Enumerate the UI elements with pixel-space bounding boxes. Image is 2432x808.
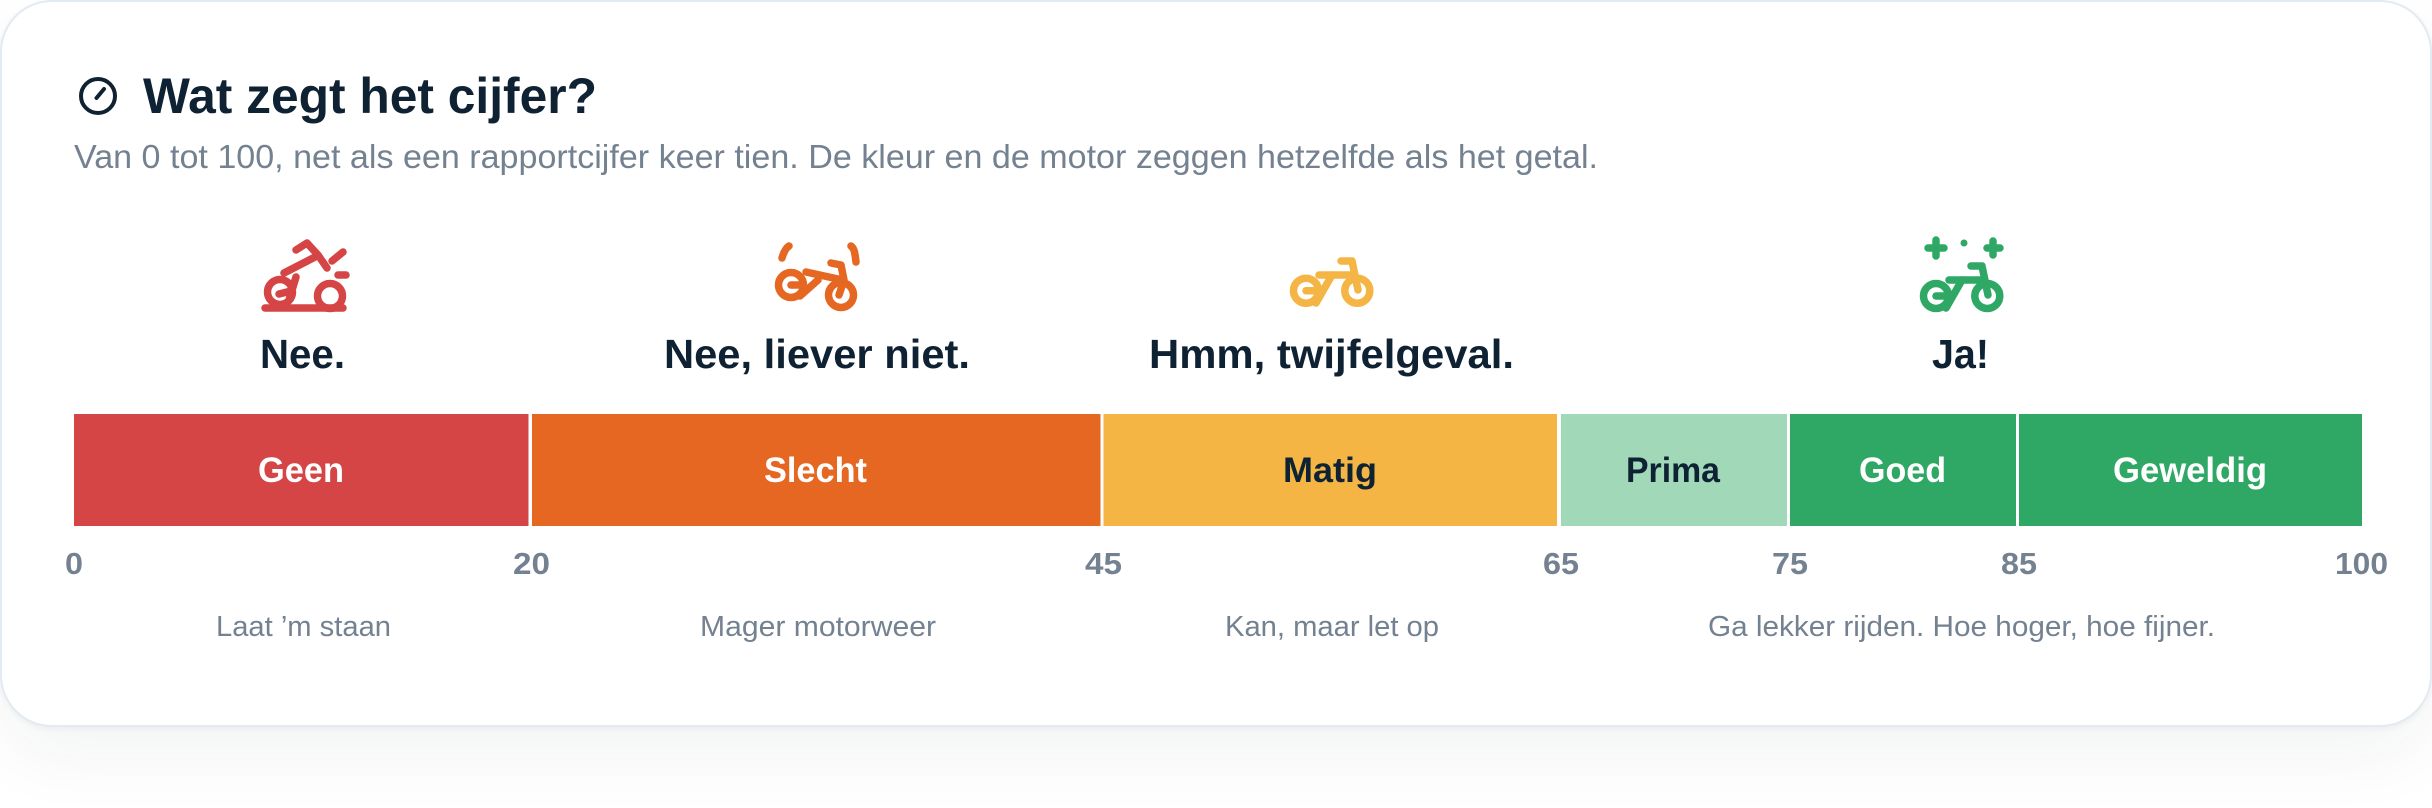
segment: Matig	[1104, 414, 1557, 526]
scale numbers: 75	[1772, 546, 1808, 581]
segment: Slecht: Slecht	[764, 451, 867, 490]
segment: Matig: Matig	[1283, 451, 1377, 490]
caption: Kan, maar let op: Kan, maar let op	[1225, 611, 1439, 643]
verdict: Ja!: Ja!	[1932, 331, 1989, 377]
scale numbers: 100	[2335, 546, 2388, 581]
score bar	[74, 414, 2362, 526]
icon: gauge	[81, 79, 115, 113]
title: Wat zegt het cijfer?	[143, 68, 597, 124]
scale numbers: 45	[1085, 546, 1122, 581]
segment: Goed	[1790, 414, 2016, 526]
segment: Prima: Prima	[1626, 451, 1721, 490]
segment: Goed: Goed	[1859, 451, 1946, 490]
caption: Mager motorweer: Mager motorweer	[700, 611, 936, 643]
scale numbers: 65	[1543, 546, 1579, 581]
icon: shaky motorcycle	[778, 246, 856, 308]
segment: Geweldig	[2019, 414, 2362, 526]
scale numbers: 0	[65, 546, 83, 581]
scale numbers: 85	[2001, 546, 2037, 581]
verdict: Nee, liever niet.: Nee, liever niet.	[664, 331, 970, 377]
segment: Prima	[1561, 414, 1787, 526]
icon: crashed motorcycle	[265, 243, 346, 308]
verdict: Hmm, twijfelgeval.: Hmm, twijfelgeval.	[1149, 331, 1514, 377]
icon: happy motorcycle with sparkles	[1924, 240, 2000, 308]
verdict: Nee.: Nee.	[260, 331, 345, 377]
caption: Laat 'm staan: Laat ’m staan	[216, 611, 391, 643]
scale numbers: 20	[513, 546, 550, 581]
scale numbers	[65, 546, 2388, 581]
segment: Geweldig: Geweldig	[2113, 451, 2267, 490]
segment: Geen	[74, 414, 528, 526]
caption: Ga lekker rijden: Ga lekker rijden. Hoe hoger, hoe fijner.	[1708, 611, 2215, 643]
subtitle: Van 0 tot 100, net als een rapportcijfer keer tien. De kleur en de motor zeggen hetzelfde als het getal.	[74, 138, 1598, 175]
segment: Slecht	[532, 414, 1100, 526]
segment: Geen: Geen	[258, 451, 344, 490]
icon: motorcycle	[1294, 261, 1370, 303]
